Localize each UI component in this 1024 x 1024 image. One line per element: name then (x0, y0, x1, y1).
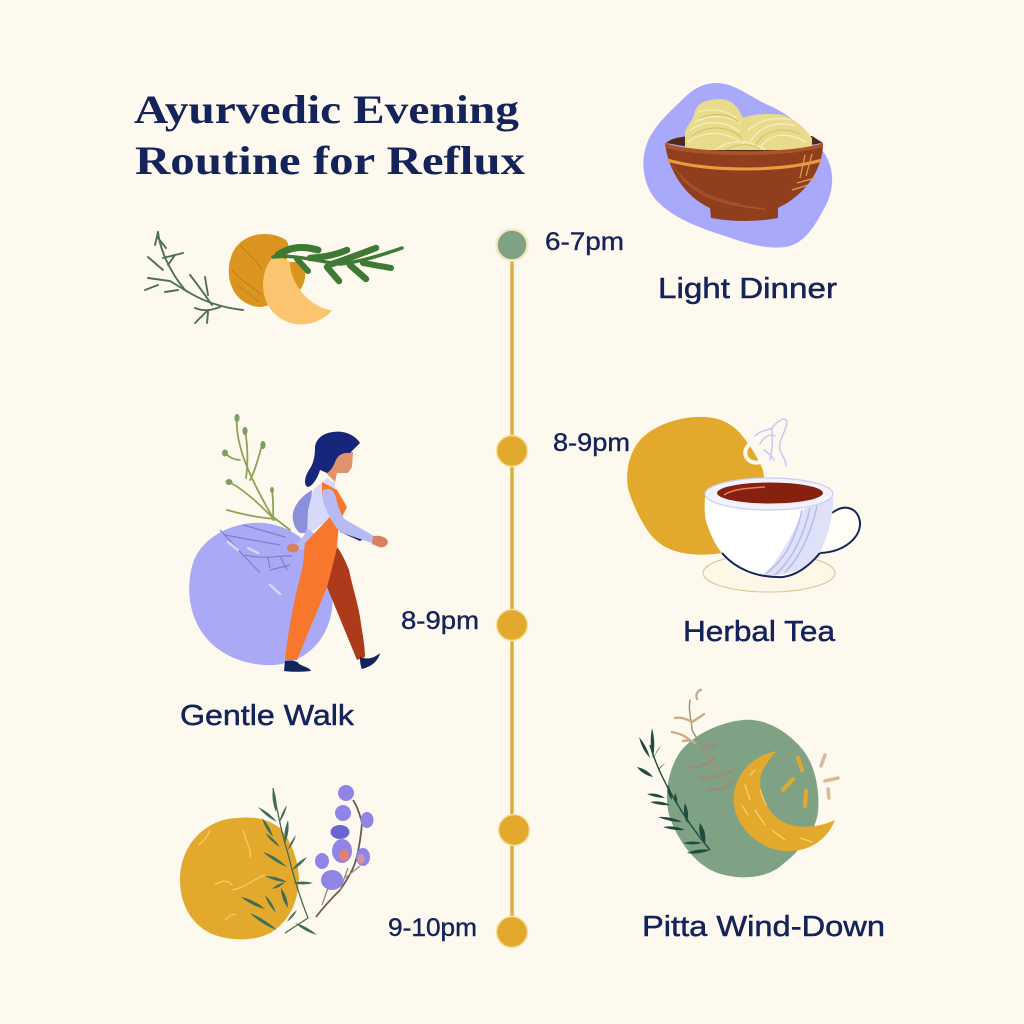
icon: noodle bowl (643, 83, 832, 248)
dark fern (637, 728, 710, 854)
timeline dot: 6-7pm (496, 230, 528, 260)
tea (717, 482, 823, 504)
time label 6-7pm: 6-7pm (545, 228, 624, 256)
title: Routine for Reflux (135, 138, 525, 183)
timeline dot: walk (496, 610, 528, 640)
orange moon (229, 234, 305, 307)
gold blob (627, 417, 765, 555)
thin herb sprig (145, 232, 243, 323)
green blob (667, 720, 818, 877)
bowl inner rim (666, 136, 823, 156)
lavender blob (643, 83, 832, 248)
handle (820, 508, 860, 553)
back arm (290, 528, 320, 551)
title: Ayurvedic Evening (134, 87, 519, 132)
saucer (703, 554, 835, 592)
front shoe (284, 661, 311, 672)
cup rim (705, 478, 833, 510)
cup shadow stripes (762, 497, 833, 577)
icon: crescent moon on green blob (637, 690, 838, 877)
icon: gold circle with herbs and flowers (180, 785, 374, 939)
label Pitta Wind-Down: Pitta Wind-Down (642, 911, 885, 943)
time label 9-10pm: 9-10pm (388, 914, 477, 942)
label Light Dinner: Light Dinner (658, 273, 837, 305)
title (134, 87, 525, 183)
label Gentle Walk: Gentle Walk (180, 700, 355, 732)
hair (305, 432, 360, 487)
cup base line (722, 553, 820, 577)
cup body (705, 497, 833, 577)
time label 8-9pm tea: 8-9pm (553, 429, 630, 457)
fern sprig (241, 788, 317, 935)
green sprig (225, 416, 290, 530)
sprig upper leaves (672, 690, 704, 743)
sprig lower leaves (688, 746, 733, 790)
shirt torso (307, 478, 335, 535)
back leg (327, 547, 365, 660)
sprig stem (689, 700, 733, 787)
white streaks (228, 542, 280, 594)
time label 8-9pm walk: 8-9pm (401, 607, 479, 635)
forward arm (322, 489, 374, 543)
overalls (285, 482, 347, 660)
icon: woman walking (189, 414, 388, 672)
icon: moon with herbs (145, 232, 402, 324)
seed flecks (783, 755, 838, 806)
label Herbal Tea: Herbal Tea (683, 616, 836, 648)
scarf (293, 490, 312, 533)
timeline (496, 230, 530, 948)
light crescent (263, 258, 332, 324)
bare branches (220, 525, 292, 573)
timeline dot: extra (498, 814, 530, 846)
steam (745, 419, 787, 466)
bowl (665, 143, 823, 221)
hand back (287, 544, 299, 552)
faded sprig (672, 690, 733, 790)
dark strap (340, 526, 365, 541)
lavender circle (189, 523, 332, 665)
lilac flowers (315, 785, 374, 917)
gold circle (180, 817, 299, 939)
noodles (685, 99, 812, 150)
icon: tea cup (627, 417, 860, 592)
face (323, 450, 353, 482)
timeline dot: wind-down (496, 916, 528, 948)
timeline dot: tea (496, 436, 528, 466)
rosemary sprig (273, 248, 402, 281)
crescent moon (734, 751, 835, 851)
rear shoe (360, 653, 380, 669)
hand forward (372, 536, 388, 547)
